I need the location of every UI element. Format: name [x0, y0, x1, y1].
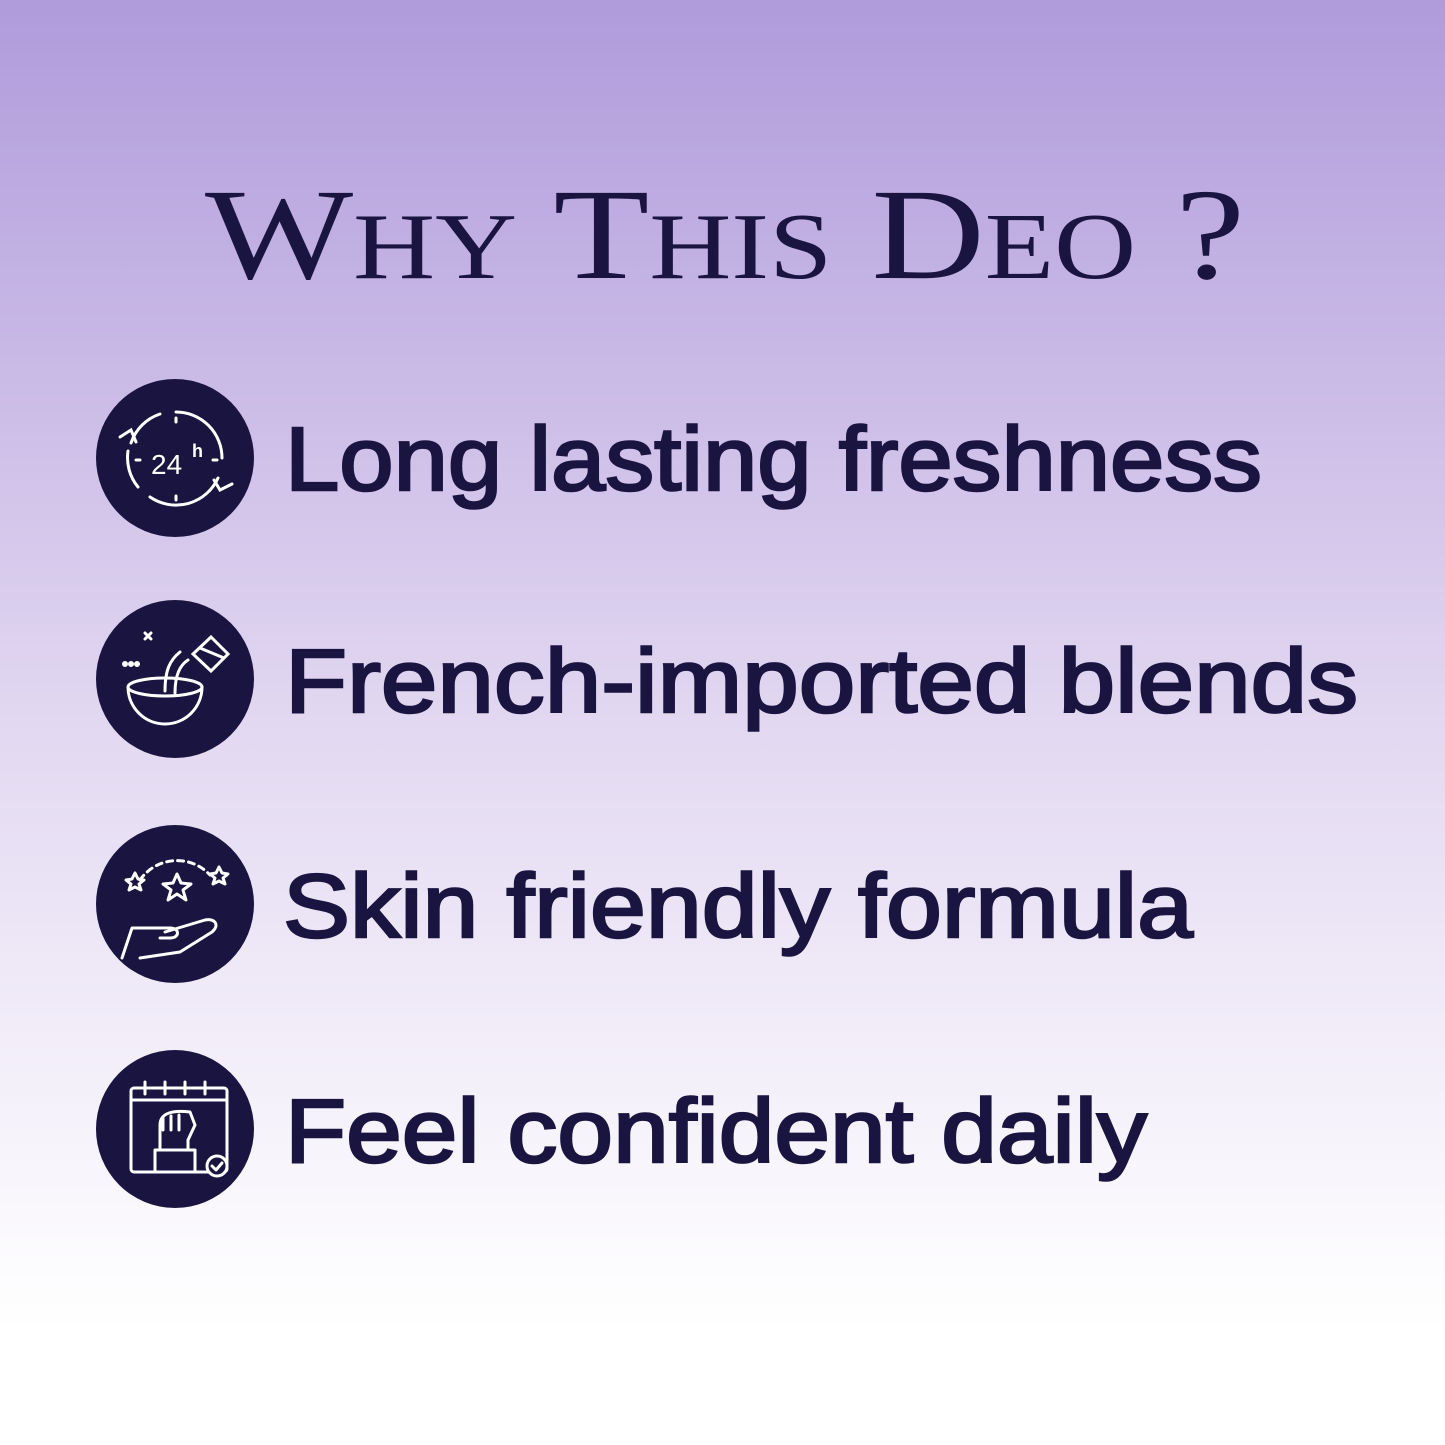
label text: Skin friendly formula	[283, 857, 1194, 957]
label text: Long lasting freshness	[285, 410, 1262, 510]
icon: 24h clock: 24	[151, 449, 182, 480]
item: long lasting freshness	[96, 379, 1262, 537]
item: skin friendly formula	[96, 825, 1194, 983]
icon: hand with stars	[96, 825, 254, 983]
item: feel confident daily	[96, 1050, 1147, 1208]
label text: French-imported blends	[285, 632, 1358, 732]
title: W HY THIS D EO ?	[205, 163, 1245, 307]
icon: 24h clock	[96, 379, 254, 537]
icon: 24h clock: h	[192, 441, 203, 461]
icon: bowl	[96, 600, 254, 758]
icon: calendar fist	[96, 1050, 254, 1208]
item: french-imported blends	[96, 600, 1358, 758]
label text: Feel confident daily	[285, 1082, 1147, 1182]
